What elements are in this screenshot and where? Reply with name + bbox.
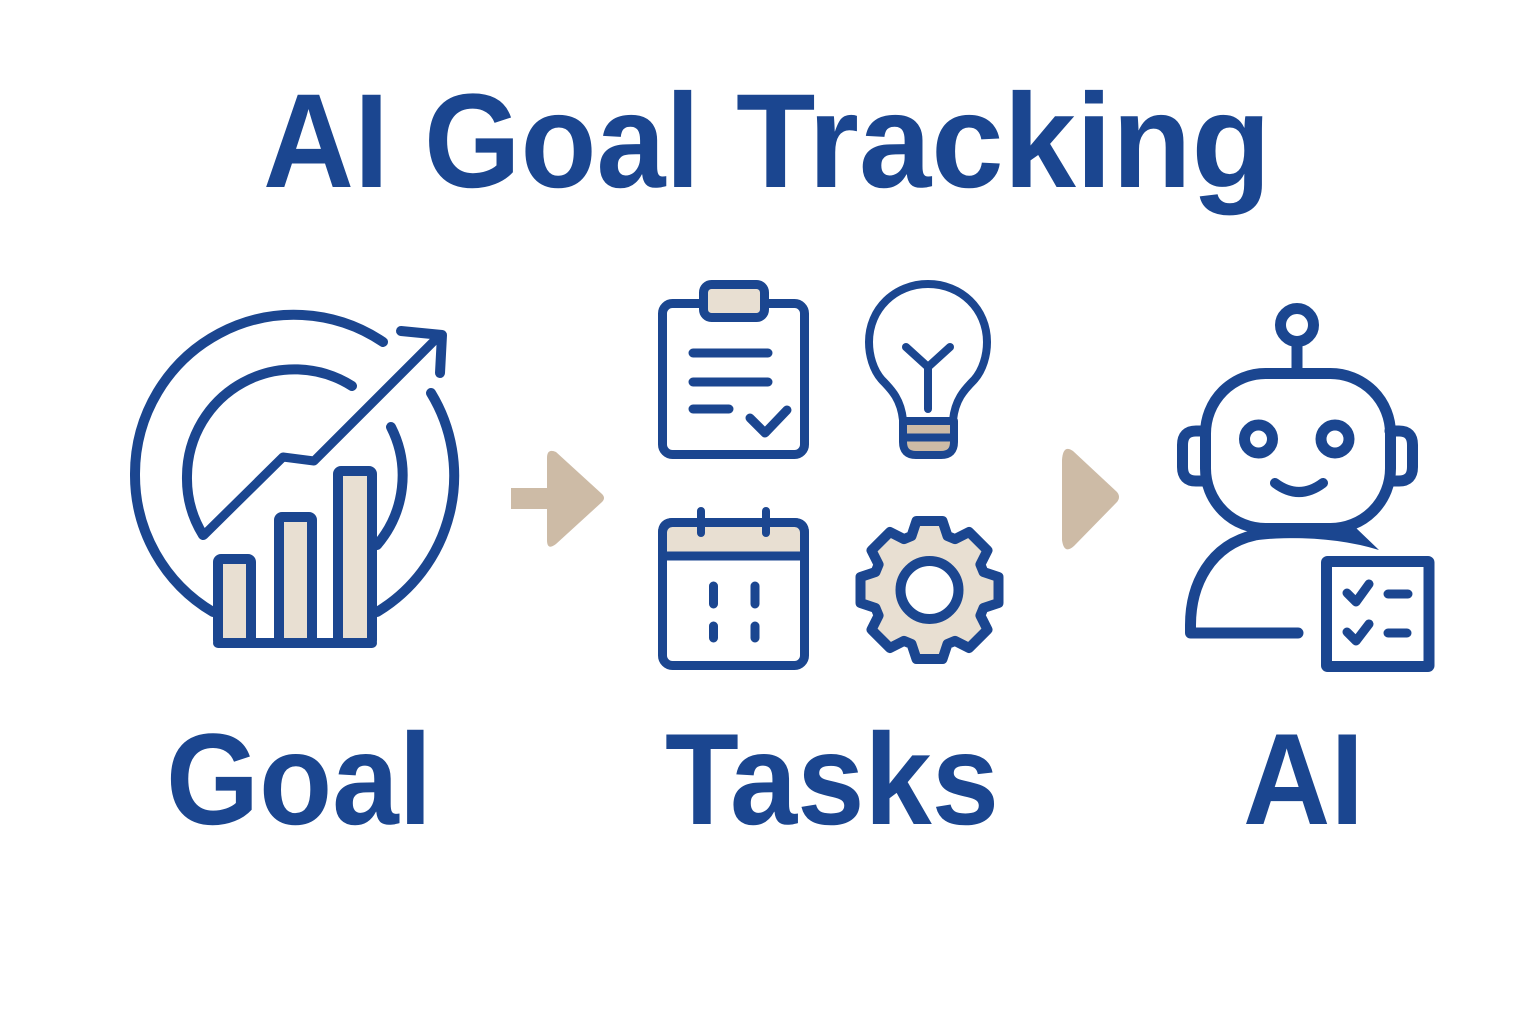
title: Goal (424, 67, 700, 216)
icon: goal chart (135, 315, 454, 643)
arrow: tasks to AI (1062, 449, 1119, 549)
title: AI (263, 67, 389, 216)
title (263, 67, 1271, 216)
label: Goal: Goal (166, 706, 432, 852)
label: Tasks: Tasks (665, 706, 999, 852)
icon: clipboard (662, 284, 804, 454)
icon: light bulb (869, 284, 987, 455)
icon: gear (860, 521, 998, 659)
icon: calendar (662, 511, 804, 666)
icon: robot (1182, 308, 1429, 666)
label: AI: AI (1243, 706, 1364, 852)
title: Tracking (736, 67, 1271, 216)
arrow: goal to tasks (511, 451, 604, 547)
